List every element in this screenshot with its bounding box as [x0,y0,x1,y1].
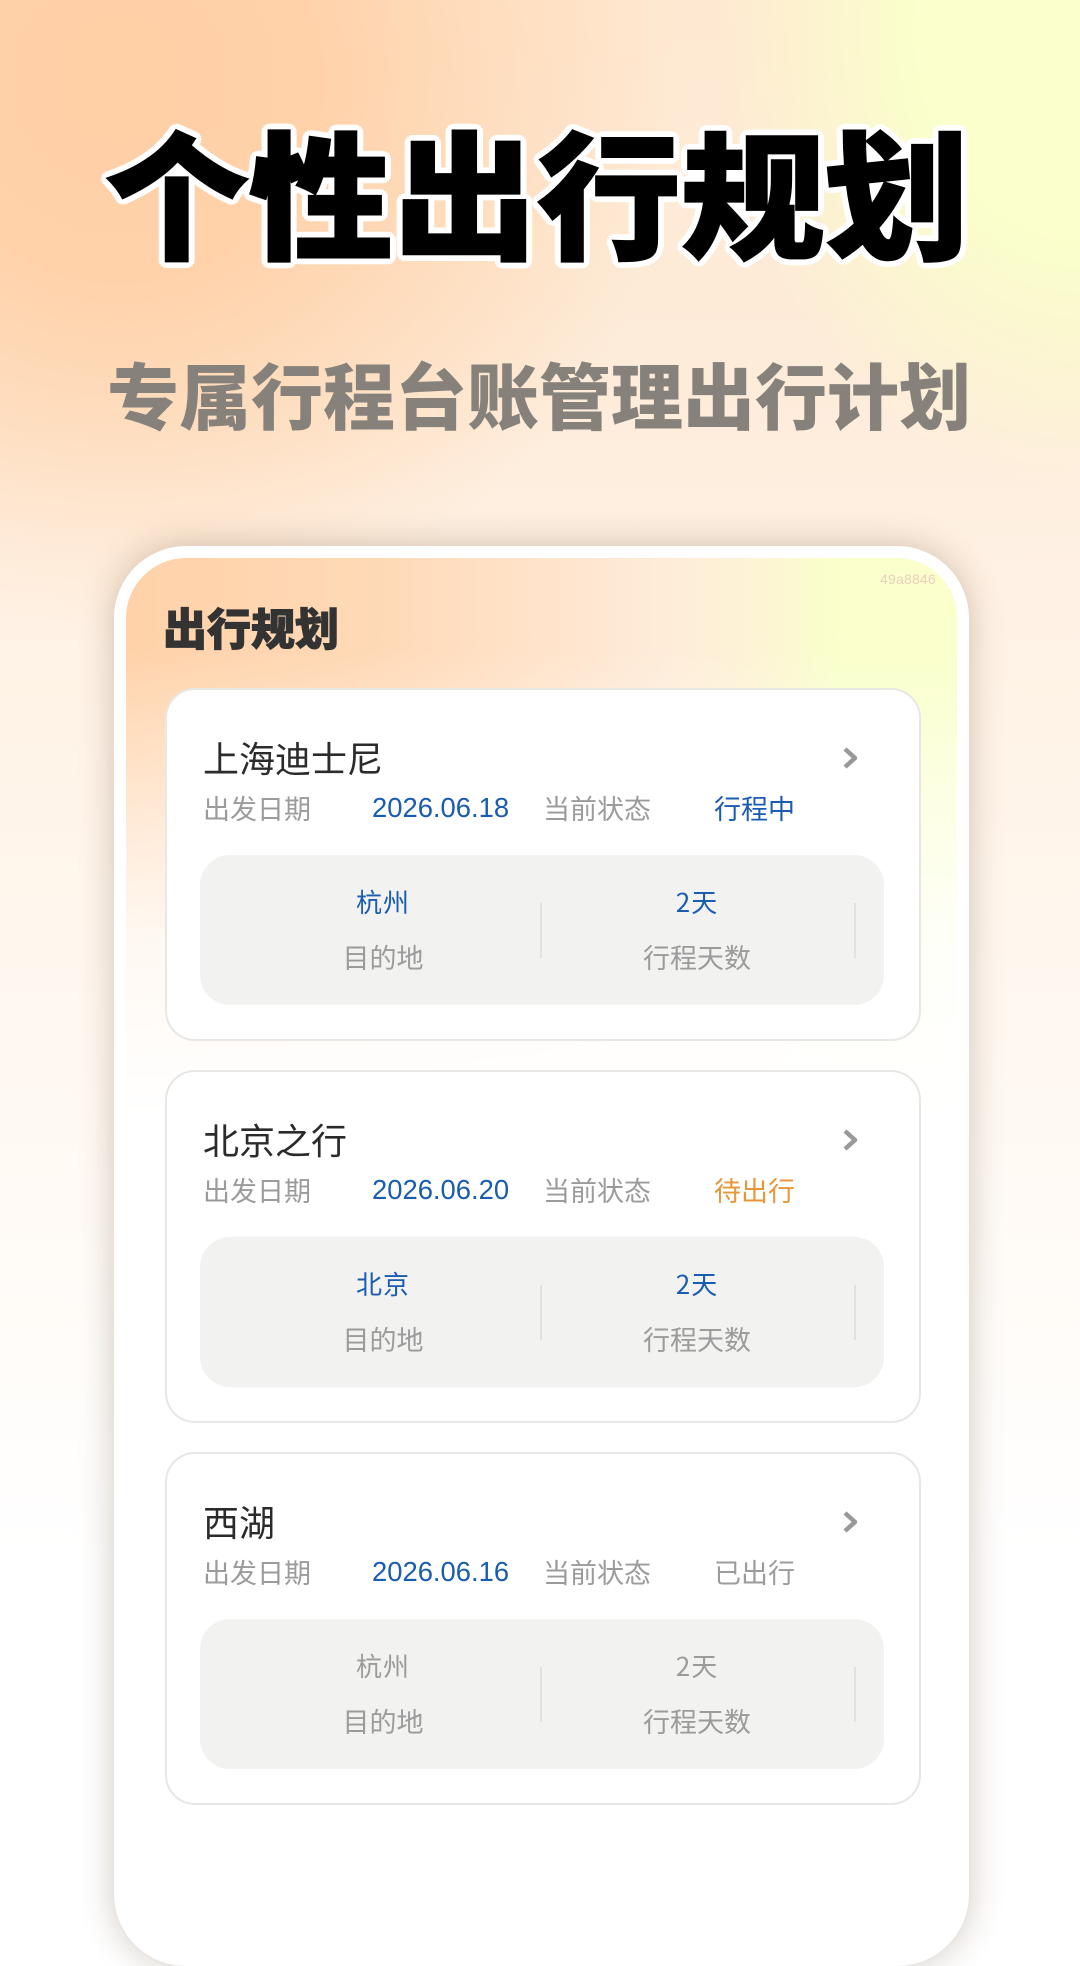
divider [540,1667,542,1722]
trip name: 北京之行 [203,1113,347,1165]
status value: 待出行 [714,1170,795,1209]
panel: trip card 西湖 [165,1452,921,1805]
divider [540,1285,542,1340]
panel: trip stats [200,1237,884,1387]
divider [854,1285,856,1340]
status value: 已出行 [714,1552,795,1591]
destination caption: 目的地 [342,937,424,976]
divider [854,1667,856,1722]
panel: phone mockup [114,546,969,1966]
status label: 当前状态 [543,1552,651,1591]
subtitle: 专属行程台账管理出行计划 [107,340,971,445]
destination caption: 目的地 [342,1319,424,1358]
destination value: 杭州 [356,883,410,920]
days caption: 行程天数 [643,1701,751,1740]
trip name: 上海迪士尼 [203,731,383,783]
departure date label: 出发日期 [203,1170,311,1209]
status label: 当前状态 [543,788,651,827]
departure date value: 2026.06.18 [372,792,509,823]
departure date value: 2026.06.20 [372,1174,509,1205]
days value: 2天 [676,1265,718,1302]
departure date label: 出发日期 [203,788,311,827]
trip name: 西湖 [203,1495,275,1547]
panel: trip card 北京之行 [165,1070,921,1423]
days value: 2天 [676,1647,718,1684]
screen heading: 出行规划 [163,594,339,658]
departure date value: 2026.06.16 [372,1556,509,1587]
destination value: 杭州 [356,1647,410,1684]
title: 个性出行规划 [105,89,969,289]
status label: 当前状态 [543,1170,651,1209]
icon: chevron [844,1130,858,1150]
destination caption: 目的地 [342,1701,424,1740]
days caption: 行程天数 [643,937,751,976]
icon: chevron [844,1512,858,1532]
panel: app screen [126,558,957,1954]
status value: 行程中 [714,788,795,827]
divider [854,903,856,958]
divider [540,903,542,958]
destination value: 北京 [356,1265,410,1302]
days value: 2天 [676,883,718,920]
departure date label: 出发日期 [203,1552,311,1591]
panel: trip stats [200,1619,884,1769]
watermark code: 49a8846 [880,571,936,587]
panel: trip stats [200,855,884,1005]
days caption: 行程天数 [643,1319,751,1358]
panel: trip card 上海迪士尼 [165,688,921,1041]
icon: chevron [844,748,858,768]
